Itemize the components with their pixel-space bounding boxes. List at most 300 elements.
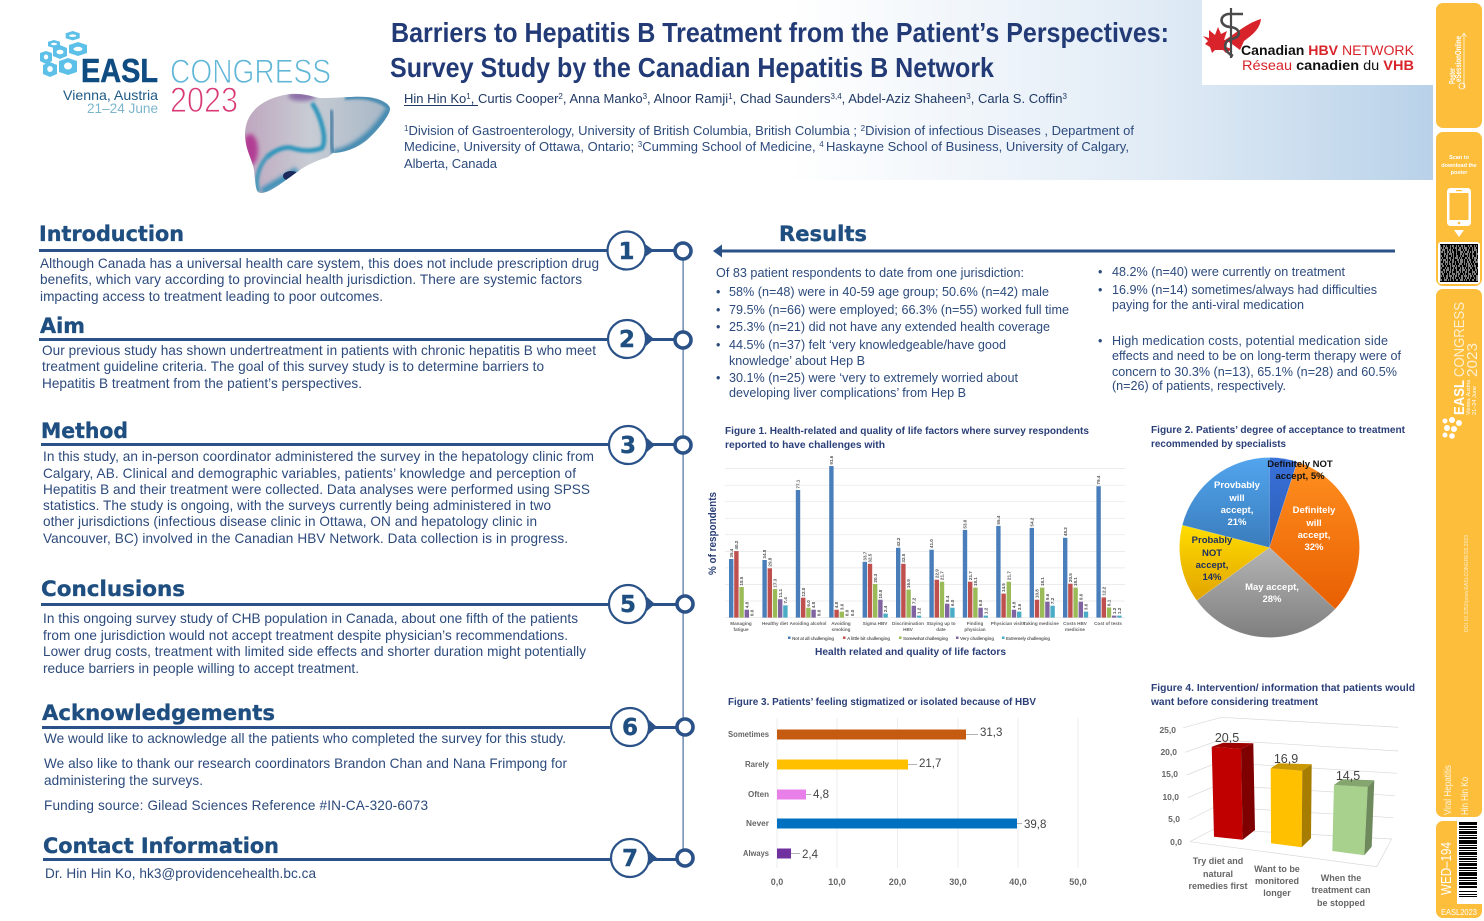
icon: EASL hexagon cluster [40,31,87,77]
bars: Costs HBV medicine: 3.6 [1084,603,1089,610]
bars: Stigma HBV: 2.4 [883,605,888,612]
legend: A little bit challenging [847,636,890,641]
value labels: 14,5 [1336,769,1360,783]
value labels: 16,9 [1274,752,1298,766]
bars: Healthy diet: 17.3 [773,578,778,588]
results right column [1098,265,1402,393]
y axis labels: 20,0 [1160,747,1177,757]
bars: Physician visits: 4.8 [1012,601,1017,608]
bars: Finding physician: 53.0 [963,519,968,529]
x axis labels: 50,0 [1069,877,1087,887]
category labels: Never [746,819,769,828]
figure 4: 3D column chart [1150,682,1415,908]
scan caption: download the [1441,163,1477,169]
bars: Finding physician [963,519,988,618]
category labels: Discrimination [892,621,924,626]
EASL Congress logo [40,31,331,120]
title [390,17,1169,83]
bars: Costs HBV medicine: 18.1 [1073,577,1078,586]
acknowledgements text: administering the surveys. [44,773,203,788]
figure 1 title [725,425,1089,451]
marker 5: 5 [620,592,636,618]
sidebar: poster session online panel [1436,3,1482,128]
affiliations: 1 [404,124,409,133]
bars: Physician visits [996,515,1022,618]
x axis title: Health related and quality of life factors [815,646,1006,658]
icon: smartphone [1447,188,1471,226]
poster session logo text: eSessionOnline [1454,36,1463,82]
acknowledgements text [44,731,567,813]
timeline connector [682,258,684,858]
bars: Discrimination HBV: 7.2 [911,597,916,604]
category labels: When the [1321,873,1361,883]
affiliations: Division of infectious Diseases , Department of [865,123,1134,138]
results left column: 25.3% (n=21) did not have any extended health coverage [729,320,1050,334]
category labels: Costs HBV [1063,621,1088,626]
scan caption [1441,155,1477,176]
bars: Cost of tests [1096,475,1122,618]
header gradient band [0,0,1433,180]
marker 6: 6 [622,715,638,741]
congress tag: EASL2023 [1441,907,1477,917]
value labels: 21,7 [919,758,941,770]
conclusions text: from one jurisdiction would not accept treatment despite physician’s recommendations. [43,628,568,643]
method text: In this study, an in-person coordinator administered the survey in the hepatology clinic from [43,449,594,464]
Canadian HBV Network logo [1202,0,1433,85]
figure 1 title: Figure 1. Health-related and quality of life factors where survey respondents [725,425,1089,437]
results right column: • [1098,265,1102,279]
results right column: High medication costs, potential medication side [1112,334,1388,348]
authors: , Anna Manko [563,91,643,106]
bars: Managing fatigue: 18.5 [739,576,744,586]
category labels: smoking [832,627,851,632]
authors: , [471,91,478,106]
bars: Costs HBV medicine: 48.2 [1063,527,1068,536]
results left column: Of 83 patient respondents to date from one jurisdiction: [716,266,1024,280]
authors: 3 [643,92,648,101]
title line 2: Survey Study by the Canadian Hepatitis B Network [390,52,994,83]
y axis labels: 10,0 [1162,792,1179,802]
affiliations: Division of Gastroenterology, University of British Columbia, British Columbia ; [408,123,861,138]
bars: Discrimination HBV: 42.2 [896,537,901,547]
pie labels: accept, [1221,505,1253,516]
icon: down arrow [1454,230,1464,237]
bars: Finding physician: 6.0 [978,599,983,606]
bars: Discrimination HBV: 16.9 [906,579,911,588]
conclusions text: Lower drug costs, treatment with limited side effects and shorter duration might potentially [43,644,586,659]
authors: , Alnoor Ramji [647,91,728,106]
value labels: 2,4 [802,849,819,861]
results right column: effects and need to be on long-term therapy were of [1112,349,1402,363]
legend [788,636,1050,641]
category labels: natural [1203,869,1233,879]
conclusions text [43,611,586,676]
x axis labels: 30,0 [949,877,967,887]
category labels: monitored [1255,876,1299,886]
category labels: Try diet and [1193,856,1243,866]
results right column: paying for the anti-viral medication [1112,298,1304,312]
author: Hin Hin Ko [1460,777,1471,815]
panel: method [41,419,691,546]
contact text: Dr. Hin Hin Ko, hk3@providencehealth.bc.ca [45,866,316,881]
legend: Somewhat challenging [903,636,948,641]
conclusions text: In this ongoing survey study of CHB population in Canada, about one fifth of the patients [43,611,578,626]
method text: Hepatitis B and their treatment were collected. Data analyses were performed using SPSS [43,482,590,497]
bars: Stigma HBV: 33.7 [862,551,867,561]
bars: Cost of tests: 6.1 [1107,599,1112,606]
bars: Finding physician: 18.1 [973,577,978,586]
figure 1 title: reported to have challenges with [725,439,885,451]
category labels: Finding [967,621,983,626]
affiliations: Alberta, Canada [404,156,498,171]
heading: Conclusions: Conclusions [41,577,185,601]
pie labels: 32% [1304,542,1324,553]
category labels [730,621,1122,632]
aim text: Our previous study has shown undertreatment in patients with chronic hepatitis B who meet [42,343,596,358]
heading: Method: Method [41,419,128,443]
y axis labels: 0,0 [1170,837,1182,847]
pie labels: Definitely NOT [1267,459,1333,470]
heading: Acknowledgements: Acknowledgements [42,701,275,725]
value labels: 31,3 [980,727,1002,739]
category labels: Sigma HBV [863,621,888,626]
affiliations: Medicine, University of Ottawa, Ontario; [404,139,634,154]
bars: Managing fatigue: 40.2 [734,540,739,550]
pie labels: accept, 5% [1275,471,1325,482]
network name line 1: Canadian HBV NETWORK [1241,43,1414,58]
rotated CONGRESS wordmark: CONGRESS [1451,302,1468,377]
pie labels: accept, [1298,530,1330,541]
value labels: 39,8 [1024,819,1046,831]
figure 1: grouped bar chart [707,425,1125,658]
category labels: Physician visits [991,621,1026,626]
marker 3: 3 [620,433,636,459]
bars [777,730,1022,858]
bars: Stigma HBV: 10.8 [878,589,883,599]
authors: , Carla S. Coffin [971,91,1063,106]
rotated location and dates [1466,379,1478,415]
bars: Physician visits: 14.5 [1001,583,1006,592]
authors: Curtis Cooper [478,91,558,106]
sidebar: congress panel [1436,289,1482,817]
bars: Staying up to date [929,539,955,618]
bars: Avoiding smoking: 0.0 [850,609,855,616]
pie labels: NOT [1202,548,1222,559]
y axis labels: 5,0 [1168,814,1180,824]
bars: Healthy diet: 29.8 [767,557,772,567]
y axis labels [1159,725,1182,847]
panel: aim [39,314,691,391]
bars: Healthy diet [762,549,788,618]
bars: Cost of tests: 79.4 [1096,475,1101,485]
bars: Staying up to date: 21.7 [940,571,945,580]
legend: Not at all challenging [792,636,834,641]
y axis label: % of respondents [707,492,719,575]
marker 7 [611,839,693,877]
marker 5 [609,585,693,623]
yellow column [1271,763,1312,847]
bars: Stigma HBV [862,551,888,618]
bars: Avoiding alcohol: 0.0 [816,609,821,616]
marker 2: 2 [619,327,635,353]
method text [43,449,594,546]
authors: Hin Hin Ko [404,91,466,106]
affiliations: 2 [861,124,866,133]
DOI line: DOI 10.3252/pcwv.EASLCONGRESS.2023 [1464,535,1470,632]
bars: Staying up to date: 22.9 [934,569,939,578]
bars: Discrimination HBV [896,537,922,618]
authors: 1 [466,92,471,101]
bars: Managing fatigue: 4.8 [744,601,749,608]
bars: Healthy diet: 11.1 [778,588,783,598]
y axis labels: 15,0 [1161,769,1178,779]
marker 1: 1 [618,239,635,265]
pie slices [1179,457,1359,637]
rotated year: 2023 [1464,343,1481,377]
pie labels: 21% [1227,517,1247,528]
acknowledgements text: Funding source: Gilead Sciences Reference #IN-CA-320-6073 [44,798,428,813]
figure 4 title: Figure 4. Intervention/ information that patients would [1151,682,1415,694]
bars: Avoiding alcohol: 77.1 [796,479,801,489]
bars: Managing fatigue [729,540,755,618]
intro text [40,256,599,304]
bars: Avoiding alcohol [796,479,821,618]
bars: Stigma HBV: 20.3 [873,573,878,583]
category labels: Staying up to [926,621,956,626]
affiliations: 3 [638,140,643,149]
category labels: Sometimes [728,730,770,739]
bars: Avoiding alcohol: 4.8 [811,601,816,608]
results left column: • [716,303,720,317]
bars: Taking medicine: 7.2 [1050,597,1055,604]
category labels: Managing [730,621,752,626]
green column [1332,779,1374,855]
bars: Healthy diet: 7.4 [783,597,788,604]
bars: Taking medicine: 18.1 [1040,577,1045,586]
affiliations: Haskayne School of Business, University of Calgary, [826,139,1129,154]
icon: maple leaf and wing [1203,19,1261,53]
authors: 3 [966,92,971,101]
method text: other jurisdictions (infectious disease clinic in Ottawa, ON and hepatology clinic in [43,514,537,529]
results left column: developing liver complications’ from Hep B [729,386,966,400]
bars: Stigma HBV: 32.5 [868,553,873,563]
bars: Avoiding smoking [829,455,855,618]
results left column [716,266,1069,400]
barcode [1459,822,1477,900]
pie labels: will [1305,518,1322,529]
panel: introduction [39,222,691,304]
panel: acknowledgements [42,701,693,813]
sidebar: scan panel [1436,132,1482,286]
figure 3 title: Figure 3. Patients’ feeling stigmatized or isolated because of HBV [728,696,1036,708]
intro text: benefits, which vary according to provincial health jurisdiction. There are systemic factors [40,272,582,287]
bars: Costs HBV medicine [1063,527,1089,618]
results right column: concern to 30.3% (n=13), 65.1% (n=28) and 60.5% [1112,365,1397,379]
location: Vienna, Austria [63,87,158,103]
marker 2 [608,320,691,358]
bars: Taking medicine: 9.6 [1045,593,1050,600]
rotated location and dates: 21–24 June [1472,386,1478,415]
panel: results [713,222,1402,400]
category labels [728,730,770,858]
scan caption: poster [1451,170,1468,176]
bars: Costs HBV medicine: 20.5 [1068,573,1073,582]
bars: Staying up to date: 8.4 [945,595,950,602]
value labels: 4,8 [813,789,829,801]
category labels: physician [964,627,986,632]
CONGRESS wordmark: CONGRESS [170,53,331,91]
figure 2: pie chart [1151,424,1405,637]
legend: Extremely challenging [1006,636,1050,641]
method text: statistics. The study is ongoing, with the surveys currently being administered in two [43,498,551,513]
method text: Vancouver, BC) involved in the Canadian HBV Network. Data collection is in progress. [43,531,568,546]
results left column: • [716,285,720,299]
results right column: 48.2% (n=40) were currently on treatment [1112,265,1346,279]
results left column: 58% (n=48) were in 40-59 age group; 50.6% (n=42) male [729,285,1049,299]
authors: , Chad Saunders [733,91,831,106]
bars: Cost of tests: 1.2 [1112,607,1117,614]
bars: Managing fatigue: 0.0 [750,609,755,616]
poster session logo text [1448,33,1466,89]
bars: Finding physician: 1.2 [983,607,988,614]
sidebar: poster code panel [1436,821,1482,918]
bars: Managing fatigue: 35.4 [729,548,734,558]
results left column: knowledge’ about Hep B [729,354,865,368]
bars: Discrimination HBV: 1.2 [917,607,922,614]
bars: Physician visits: 3.6 [1017,603,1022,610]
results right column: 16.9% (n=14) sometimes/always had difficulties [1112,283,1377,297]
bars: Avoiding smoking: 91.6 [829,455,834,465]
category labels: Rarely [745,760,770,769]
x axis labels [771,877,1087,887]
intro text: impacting access to treatment leading to poor outcomes. [40,289,383,304]
bars: Finding physician: 21.7 [968,571,973,580]
bars: Avoiding smoking: 3.6 [839,603,844,610]
bars: Physician visits: 55.4 [996,515,1001,525]
results left column: • [716,320,720,334]
EASL wordmark: EASL [81,52,158,89]
marker 3 [609,426,691,464]
red column [1212,743,1255,840]
heading: Aim: Aim [40,314,85,338]
bars: Staying up to date: 41.0 [929,539,934,548]
heading: Contact Information: Contact Information [43,834,279,858]
category labels: Want to be [1254,864,1300,874]
scan caption: Scan to [1449,155,1470,161]
figure 2 title [1151,424,1405,450]
panel: contact information [43,834,693,881]
category labels: Always [743,849,770,858]
category labels: Cost of tests [1094,621,1122,626]
bars: Healthy diet: 34.8 [762,549,767,559]
pie labels: 14% [1202,572,1222,583]
figure 2 title: recommended by specialists [1151,438,1286,450]
figure 4 title [1150,682,1415,708]
value labels [1215,731,1360,783]
aim text: Hepatitis B treatment from the patient’s perspectives. [42,376,362,391]
category labels: medicine [1065,627,1085,632]
topic: Viral Hepatitis [1443,765,1454,815]
bars: Physician visits: 21.7 [1006,571,1011,580]
bars: Taking medicine [1029,517,1055,618]
category labels: Often [748,790,769,799]
legend: Very challenging [960,636,994,641]
conclusions text: reduce barriers in people willing to accept treatment. [43,661,359,676]
bars: Avoiding smoking: 0.0 [845,609,850,616]
bars: Staying up to date: 6.0 [950,599,955,606]
category labels: Taking medicine [1023,621,1059,626]
results left column: • [716,338,720,352]
acknowledgements text: We also like to thank our research coordinators Brandon Chan and Nana Frimpong for [44,756,567,771]
dates: 21–24 June [87,100,158,116]
pie labels: will [1228,493,1245,504]
authors: , Abdel-Aziz Shaheen [842,91,966,106]
marker 6 [611,708,693,746]
value labels: 20,5 [1215,731,1239,745]
panel: conclusions [41,577,693,676]
pie labels [1192,459,1336,605]
category labels: date [936,627,946,632]
y axis labels: 25,0 [1159,725,1176,735]
pie labels: Probably [1192,535,1233,546]
network name line 2: Réseau canadien du VHB [1242,58,1414,73]
authors: 1 [728,92,733,101]
category labels: treatment can [1311,885,1371,895]
results left column: 30.1% (n=25) were ‘very to extremely worried about [729,371,1018,385]
heading: Introduction: Introduction [39,222,184,246]
title line 1: Barriers to Hepatitis B Treatment from the Patient’s Perspectives: [391,17,1169,48]
bars: Cost of tests: 12.2 [1101,586,1106,596]
bars: Taking medicine: 54.2 [1029,517,1034,527]
results right column: • [1098,334,1102,348]
category labels: longer [1263,888,1291,898]
bars: Costs HBV medicine: 9.6 [1078,593,1083,600]
authors [404,91,1068,106]
icon: hexagon cluster [1442,417,1462,439]
category labels: be stopped [1317,898,1365,908]
bars: Avoiding alcohol: 6.0 [806,600,811,607]
bars: Taking medicine: 10.8 [1035,589,1040,598]
affiliations: Cumming School of Medicine, [642,139,819,154]
figure 2 title: Figure 2. Patients’ degree of acceptance to treatment [1151,424,1405,436]
marker 1 [608,232,691,270]
category labels: fatigue [733,627,749,632]
pie labels: Definitely [1293,505,1336,516]
rotated EASL: EASL [1451,380,1468,415]
rotated location and dates: Vienna, Austria [1466,379,1472,415]
icon: liver illustration [242,91,390,193]
bars: Discrimination HBV: 32.5 [901,553,906,563]
aim text [42,343,596,391]
figure 4 title: want before considering treatment [1150,696,1318,708]
category labels: Avoiding [831,621,851,626]
QR code [1438,242,1480,284]
results left column: 44.5% (n=37) felt ‘very knowledgeable/have good [729,338,1006,352]
bars: Avoiding smoking: 4.8 [834,601,839,608]
affiliations: 4 [819,140,826,149]
pie labels: accept, [1196,560,1228,571]
figure 3: horizontal bar chart [728,696,1087,887]
affiliations [404,123,1134,171]
authors: 2 [558,92,563,101]
x axis labels: 40,0 [1009,877,1027,887]
method text: Calgary, AB. Clinical and demographic variables, patients’ knowledge and perception of [43,466,576,481]
category labels: remedies first [1188,881,1248,891]
acknowledgements text: We would like to acknowledge all the patients who completed the survey for this study. [44,731,566,746]
authors: 3,4 [830,92,842,101]
results rule with arrow [713,244,1395,258]
aim text: treatment guideline criteria. The goal of this survey study is to determine barriers to [42,359,544,374]
